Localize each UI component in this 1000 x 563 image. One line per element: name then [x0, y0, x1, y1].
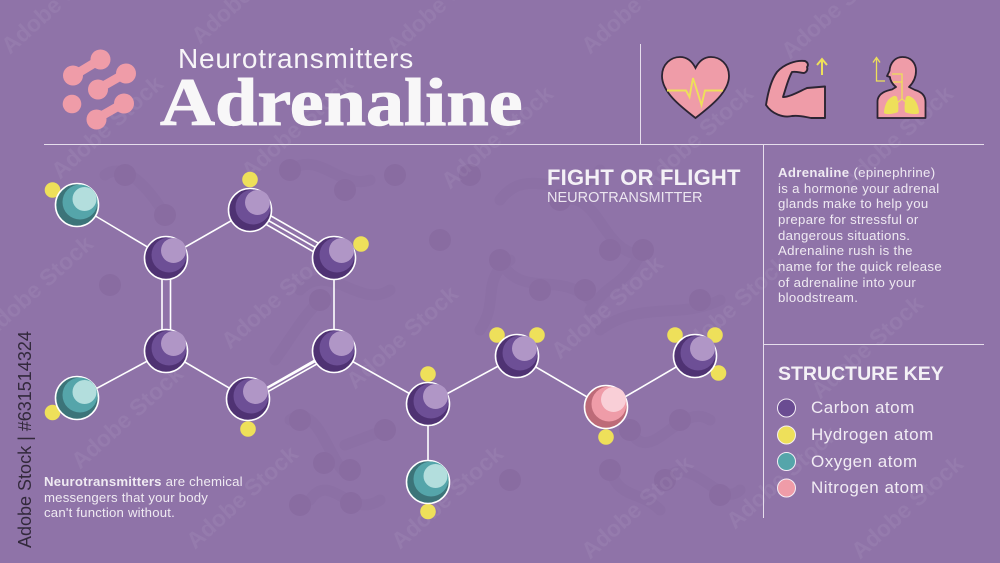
structure key heading: STRUCTURE KEY: [778, 363, 944, 385]
watermark: Adobe Stock: [436, 80, 558, 194]
icon: flexed arm with up arrow: [766, 59, 827, 118]
description text: of adrenaline into your: [778, 275, 916, 290]
watermark: Adobe Stock: [386, 440, 508, 554]
watermark: Adobe Stock: [846, 450, 968, 563]
watermark: Adobe Stock: [546, 250, 668, 364]
subtitle: Neurotransmitters: [178, 43, 414, 74]
watermark: Adobe Stock: [836, 80, 958, 194]
watermark: Adobe Stock: [806, 290, 928, 404]
carbon, oxygen and nitrogen atoms: [56, 184, 98, 226]
key label: carbon: Carbon atom: [811, 398, 915, 417]
description text: glands make to help you: [778, 196, 929, 211]
watermark: Adobe Stock: [236, 70, 358, 184]
description text: prepare for stressful or: [778, 212, 919, 227]
description text: Adrenaline (epinephrine): [778, 165, 935, 180]
background molecule pattern: [99, 159, 740, 516]
hydrogen atoms: [45, 172, 726, 519]
title: Adrenaline: [160, 64, 523, 140]
icon: heart with pulse: [662, 57, 729, 118]
watermark: Adobe Stock: [66, 360, 188, 474]
stock id side text: Adobe Stock | #631514324: [15, 331, 35, 548]
neurotransmitters note: Neurotransmitters are chemical: [44, 474, 243, 489]
neurotransmitters note: can't function without.: [44, 505, 175, 520]
icon: molecule logo: [63, 50, 136, 130]
description text: name for the quick release: [778, 259, 942, 274]
watermark: Adobe Stock: [636, 80, 758, 194]
description text: [778, 165, 942, 305]
key label: oxygen: Oxygen atom: [811, 452, 918, 470]
molecule structure: [45, 172, 726, 519]
neurotransmitters note: [44, 474, 243, 520]
watermark: Adobe Stock: [181, 440, 303, 554]
heading: fight or flight: FIGHT OR FLIGHT: [547, 165, 741, 190]
watermark: Adobe Stock: [671, 250, 793, 364]
bonds: [77, 205, 695, 482]
description text: Adrenaline rush is the: [778, 243, 913, 258]
icon: person with lungs and breath arrow: [873, 57, 926, 118]
key label: nitrogen: Nitrogen atom: [811, 478, 924, 497]
watermark: Adobe Stock: [576, 450, 698, 563]
divider lines: [44, 44, 984, 518]
description text: bloodstream.: [778, 290, 858, 305]
key label: hydrogen: Hydrogen atom: [811, 425, 934, 444]
subheading: neurotransmitter: NEUROTRANSMITTER: [547, 190, 702, 206]
neurotransmitters note: messengers that your body: [44, 490, 208, 504]
structure key swatches: [778, 399, 796, 497]
watermark: Adobe Stock: [46, 70, 168, 184]
description text: dangerous situations.: [778, 228, 910, 243]
watermark: Adobe Stock: [721, 420, 843, 534]
watermark: Adobe Stock: [341, 280, 463, 394]
watermark: Adobe Stock: [216, 240, 338, 354]
description text: is a hormone your adrenal: [778, 181, 939, 196]
